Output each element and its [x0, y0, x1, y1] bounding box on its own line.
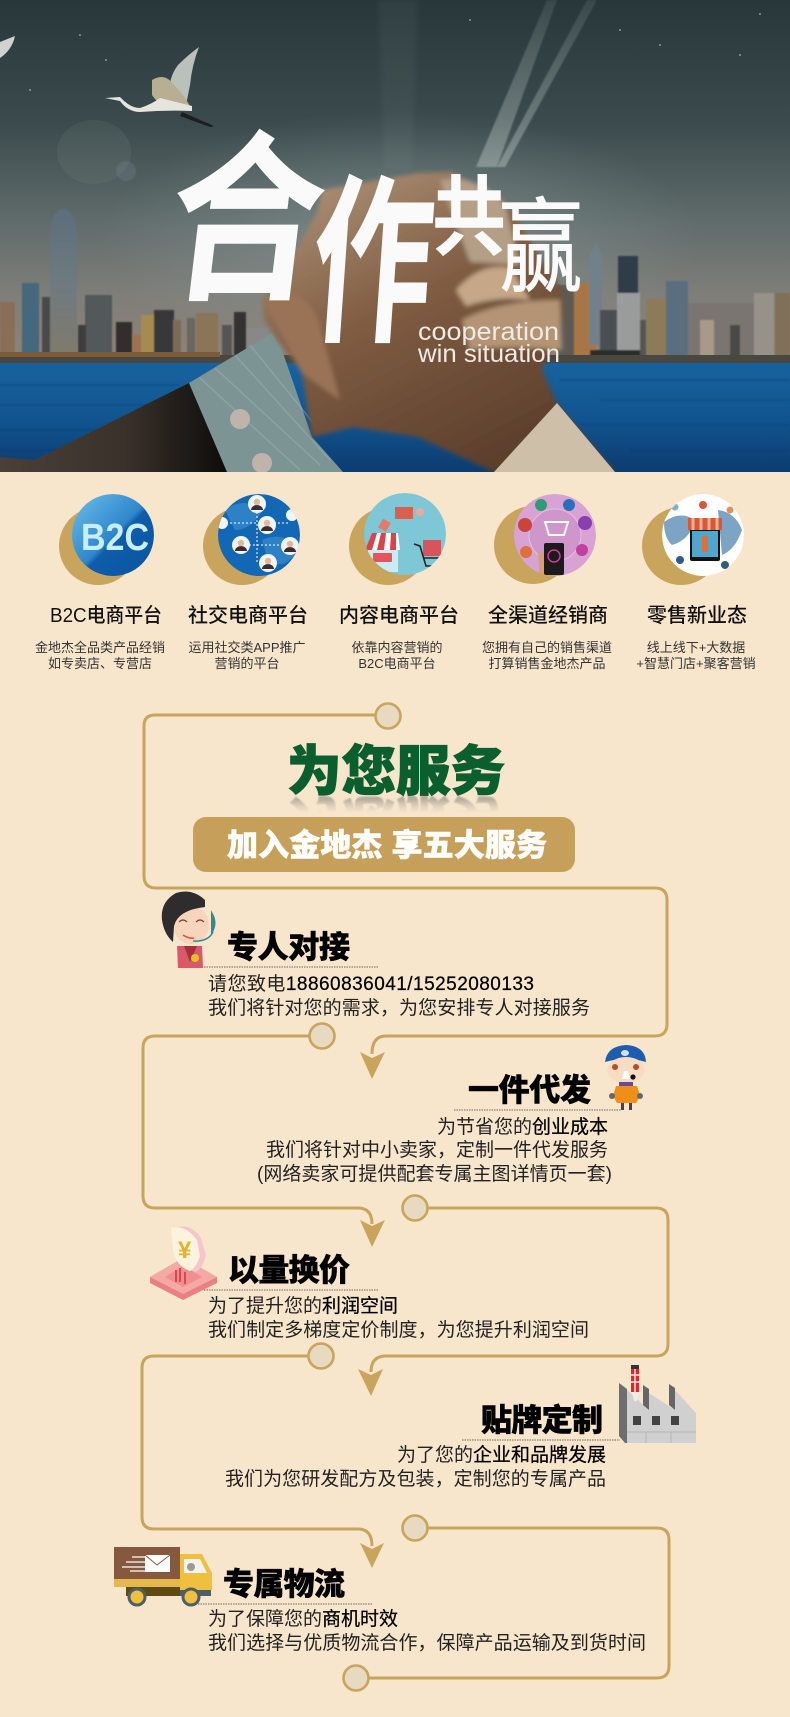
right shirt cuff	[494, 403, 615, 472]
hands	[262, 172, 615, 472]
platform: all channels	[482, 494, 612, 671]
text: 为了您的企业和品牌发展	[397, 1444, 606, 1466]
connector nodes	[308, 704, 428, 1690]
suit sleeve	[0, 383, 227, 472]
calligraphic title: 赢	[499, 164, 583, 313]
banner: join and enjoy five services	[193, 817, 575, 872]
english subtitle: cooperation	[418, 318, 559, 346]
platform: new retail: 零售新业态	[647, 604, 747, 627]
icon: price shield	[150, 1226, 217, 1300]
heading: for you service: 为您服务	[287, 789, 505, 849]
text: (网络卖家可提供配套专属主图详情页一套)	[257, 1163, 612, 1185]
icon: factory	[619, 1365, 696, 1443]
service 3	[150, 1226, 589, 1341]
platform: social: 社交电商平台	[188, 604, 308, 627]
icon: tablet store	[662, 494, 744, 576]
icon: phone cart	[514, 494, 596, 580]
platform: content	[339, 493, 459, 671]
text: 请您致电18860836041/15252080133	[208, 973, 534, 995]
sky	[0, 0, 790, 360]
icon: courier	[605, 1045, 646, 1110]
heading: for you service: 为您服务	[287, 742, 505, 802]
platform: B2C: 金地杰全品类产品经销	[35, 640, 165, 655]
text	[257, 1116, 612, 1185]
text: 我们制定多梯度定价制度，为您提升利润空间	[208, 1319, 589, 1341]
heading: 以量换价	[228, 1253, 350, 1288]
text: 我们将针对中小卖家，定制一件代发服务	[266, 1139, 608, 1161]
english subtitle	[418, 322, 558, 362]
calligraphic title: 合	[156, 74, 342, 339]
connector arrowheads	[358, 1052, 385, 1568]
icon: B2C badge: B2C	[81, 517, 149, 559]
platform: all channels: 您拥有自己的销售渠道	[482, 640, 612, 655]
platform: social: 营销的平台	[214, 656, 280, 671]
text: 我们为您研发配方及包装，定制您的专属产品	[225, 1468, 606, 1490]
skyline right	[556, 242, 790, 358]
platform: B2C	[35, 494, 165, 671]
platform: B2C: 如专卖店、专营店	[48, 656, 152, 671]
platform: new retail	[636, 494, 756, 671]
text: 为了提升您的利润空间	[208, 1295, 398, 1317]
banner: join and enjoy five services: 加入金地杰 享五大服务	[227, 828, 547, 863]
hero banner	[0, 0, 790, 473]
heading: 贴牌定制	[481, 1403, 603, 1438]
text	[208, 1295, 589, 1341]
platform: new retail: +智慧门店+聚客营销	[636, 656, 756, 671]
icon: delivery truck	[114, 1547, 212, 1605]
icon: B2C badge	[72, 494, 154, 576]
heading: 一件代发	[468, 1073, 591, 1108]
service 4	[225, 1365, 696, 1490]
platform: social: 运用社交类APP推广	[188, 640, 306, 655]
service 5	[114, 1547, 646, 1654]
platform: all channels: 打算销售金地杰产品	[488, 656, 606, 671]
platform: B2C: B2C电商平台	[50, 604, 162, 627]
text: 我们选择与优质物流合作，保障产品运输及到货时间	[208, 1632, 646, 1654]
icon: shop and cart	[364, 493, 446, 575]
heading: 专人对接	[227, 930, 350, 965]
service 2	[257, 1045, 646, 1185]
platform: new retail: 线上线下+大数据	[647, 640, 745, 655]
calligraphic title	[177, 128, 580, 344]
heading: for you service	[287, 742, 505, 849]
calligraphic title: 共	[432, 148, 506, 274]
platform: all channels: 全渠道经销商	[488, 604, 608, 627]
icon: support agent	[162, 892, 214, 968]
bird	[0, 36, 214, 127]
text: 为了保障您的商机时效	[208, 1608, 398, 1630]
panel: platform types	[35, 493, 756, 671]
platform: content: 内容电商平台	[339, 604, 459, 627]
english subtitle: win situation	[417, 340, 560, 368]
icon: price shield: ¥	[178, 1237, 192, 1264]
calligraphic title: 作	[304, 118, 444, 380]
text	[225, 1444, 606, 1490]
text: 为节省您的创业成本	[437, 1116, 608, 1138]
shore	[0, 355, 790, 363]
text: 我们将针对您的需求，为您安排专人对接服务	[208, 997, 590, 1019]
connector path	[142, 704, 669, 1690]
platform: content: B2C电商平台	[358, 656, 436, 671]
heading: 专属物流	[223, 1567, 345, 1602]
text	[208, 1608, 646, 1654]
service 1	[162, 892, 590, 1019]
sea	[0, 363, 790, 472]
skyline left	[0, 209, 269, 357]
platform: social	[188, 494, 308, 671]
icon: social network	[216, 494, 300, 576]
text	[208, 973, 590, 1019]
left shirt cuff	[189, 333, 343, 473]
platform: content: 依靠内容营销的	[351, 640, 443, 655]
